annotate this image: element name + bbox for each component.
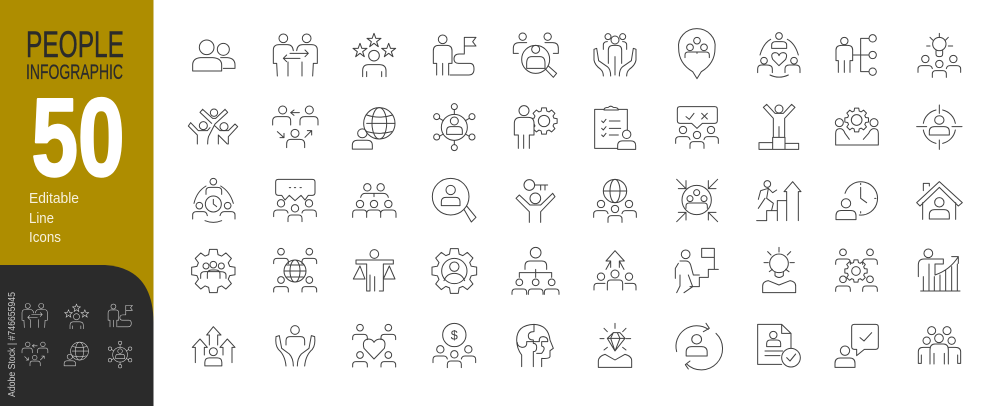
icon: cheering group	[188, 109, 238, 144]
icons: row 1 left and row 2 left	[188, 33, 558, 151]
icons: row 3 left and row 4 left	[192, 178, 559, 294]
stock id vertical text: Adobe Stock | #746655945	[7, 292, 18, 397]
icon: organisation chart	[512, 247, 559, 294]
icon: hands caring for people	[594, 34, 636, 76]
icon: search person	[432, 178, 476, 222]
icon: two people	[193, 40, 235, 71]
icon: person with hierarchy	[836, 35, 876, 75]
icon: location pin with people	[678, 29, 715, 79]
icon: team growth arrow	[594, 251, 636, 290]
icon: coin over people	[433, 323, 476, 368]
icon: idea over people	[918, 33, 961, 77]
icon: discussion bubble over people	[274, 179, 316, 222]
icons: row 5 right	[598, 323, 961, 370]
icon: gear between two people	[835, 108, 878, 145]
icon: person rotation	[676, 323, 723, 370]
icon: people around globe	[274, 248, 317, 292]
icon: person balancing scales	[353, 250, 395, 291]
icon: person and clock	[836, 182, 878, 220]
icon: team of five	[353, 184, 396, 217]
big number 50: 50	[32, 76, 124, 200]
subtitle: INFOGRAPHIC: INFOGRAPHIC	[26, 61, 123, 84]
icon: people with arrows	[273, 106, 318, 148]
icon: coin over people: $	[451, 329, 458, 343]
icon: crowd	[918, 327, 961, 364]
icon: targeted person	[917, 105, 962, 149]
mini icon: network hub	[108, 341, 132, 368]
mini icons in dark panel	[22, 303, 132, 368]
icon: person with gear	[514, 106, 557, 148]
icon: person at home	[917, 182, 962, 219]
icon: people exchange	[273, 34, 317, 76]
icon: climbing to flag	[675, 248, 718, 293]
icon: speech bubble over people	[676, 107, 718, 148]
icon: team in gear	[192, 249, 235, 293]
icon: person presenting chart	[918, 249, 960, 291]
text block: Editable Line Icons: Editable	[29, 190, 79, 207]
icon: person climbing to growth	[757, 181, 801, 221]
icon: person with diamond head	[598, 323, 632, 367]
panel: dark corner	[0, 265, 154, 406]
icon: person with key	[516, 180, 555, 222]
icon: clipboard with person	[595, 106, 636, 149]
icons: row 5 left	[192, 323, 553, 368]
mini icon: person and globe	[64, 342, 88, 366]
icon: gear between four people	[836, 249, 877, 291]
icon: person in gear	[432, 249, 477, 293]
icon: head with puzzle	[517, 324, 553, 367]
icon: approved resume document	[758, 324, 800, 367]
icon: global team	[594, 179, 636, 222]
text block: Editable Line Icons: Line	[29, 210, 54, 227]
icon: person with path to flag	[433, 35, 476, 75]
icon: person and globe	[352, 108, 395, 149]
icon: people around a clock	[193, 178, 235, 222]
mini icon: people exchange	[22, 303, 47, 328]
icon: person with check bubble	[835, 324, 878, 367]
icon: winner on podium	[759, 104, 799, 149]
icon: focus on team	[677, 179, 718, 222]
icon: person with rising arrows	[192, 327, 235, 366]
panel: gold sidebar	[0, 0, 154, 406]
icons: row 1 right and row 2 right	[594, 29, 962, 149]
icon: search among people	[513, 33, 558, 77]
mini icon: path to flag	[108, 304, 132, 327]
icon: rated person with stars	[353, 33, 396, 77]
icon: hands supporting person	[276, 326, 315, 366]
mini icon: people with arrows	[22, 342, 48, 366]
title: PEOPLE: PEOPLE	[26, 24, 124, 65]
text block: Editable Line Icons	[29, 190, 79, 246]
mini icon: rated person	[65, 304, 89, 329]
icon: people around heart	[353, 324, 396, 367]
icon: people around a heart	[758, 33, 800, 77]
icon: network hub	[434, 104, 475, 151]
icons: row 3 right and row 4 right	[594, 179, 962, 293]
text block: Editable Line Icons: Icons	[29, 229, 61, 246]
icon: person with idea	[763, 247, 796, 293]
